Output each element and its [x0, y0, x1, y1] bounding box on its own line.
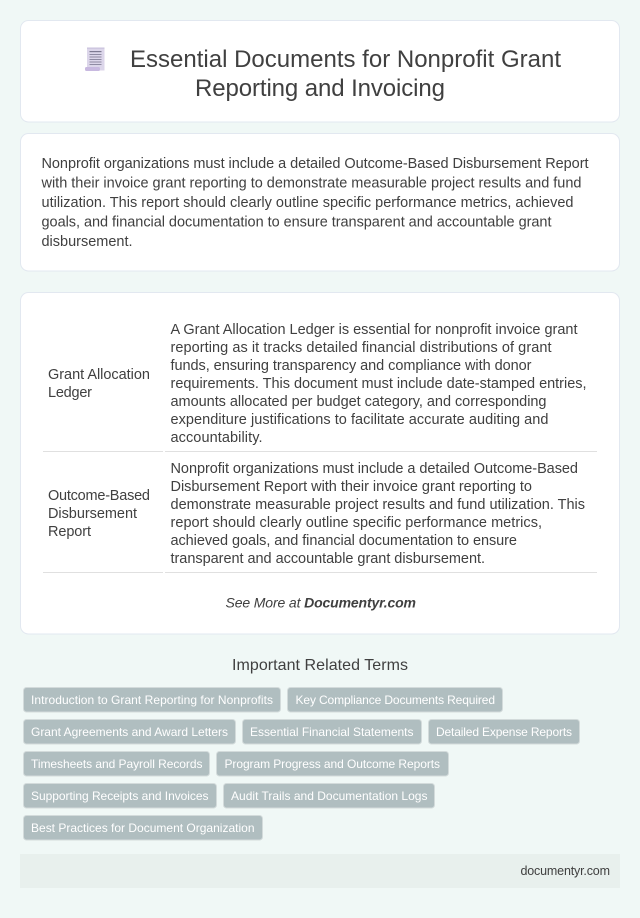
intro paragraph: goals, and financial documentation to ensure transparent and accountable grant: [42, 214, 552, 230]
tag: Supporting Receipts and Invoices: [31, 789, 208, 803]
row: Grant Allocation Ledger description: reporting as it tracks detailed financial distributions of grant: [170, 340, 552, 356]
tag: [24, 720, 236, 744]
row: Outcome-Based Disbursement Report label: [48, 488, 150, 540]
tag: Key Compliance Documents Required: [296, 693, 495, 707]
related term tags: [24, 688, 580, 840]
row: Outcome-Based Disbursement Report description: report should clearly outline specific performance metrics,: [170, 515, 542, 531]
tag: Detailed Expense Reports: [436, 725, 572, 739]
footer site name: documentyr.com: [520, 864, 610, 878]
tag: Introduction to Grant Reporting for Nonprofits: [31, 693, 273, 707]
title: Reporting and Invoicing: [195, 75, 445, 102]
tag: Grant Agreements and Award Letters: [31, 725, 228, 739]
tag: [24, 784, 216, 808]
row: Outcome-Based Disbursement Report label: Report: [48, 524, 91, 540]
row: Outcome-Based Disbursement Report description: Disbursement Report with their invoice grant reporting to: [170, 479, 532, 495]
title: [130, 46, 561, 102]
row: Outcome-Based Disbursement Report description: demonstrate measurable project results and fund utilization. This: [170, 497, 585, 513]
tag: [224, 784, 434, 808]
row: Grant Allocation Ledger description: expenditure justifications to facilitate accurate auditing and: [170, 412, 548, 428]
tag: Essential Financial Statements: [250, 725, 414, 739]
intro paragraph: with their invoice grant reporting to demonstrate measurable project results and fund: [40, 176, 582, 192]
tag: Best Practices for Document Organization: [31, 821, 254, 835]
intro paragraph: utilization. This report should clearly outline specific performance metrics, achieved: [42, 195, 574, 211]
row: Outcome-Based Disbursement Report label: Outcome-Based: [48, 488, 150, 504]
row: Outcome-Based Disbursement Report description: Nonprofit organizations must include a detailed Outcome-Based: [170, 461, 578, 477]
row: Grant Allocation Ledger label: Ledger: [48, 385, 92, 401]
tag: [288, 688, 502, 712]
row: Outcome-Based Disbursement Report description: achieved goals, and financial documentation to ensure: [170, 533, 517, 549]
intro paragraph: [40, 156, 588, 250]
icon: document scroll: [85, 48, 104, 71]
intro paragraph: Nonprofit organizations must include a detailed Outcome-Based Disbursement Report: [42, 156, 588, 172]
tag: Audit Trails and Documentation Logs: [231, 789, 428, 803]
footer bar: [20, 854, 620, 888]
intro paragraph: disbursement.: [42, 234, 132, 250]
panel: documents table: [20, 292, 620, 634]
row: Grant Allocation Ledger description: [170, 322, 586, 446]
tag: [216, 752, 448, 776]
see more link: See More at Documentyr.com: [226, 594, 416, 610]
row: Grant Allocation Ledger description: accountability.: [170, 430, 262, 446]
tag: [24, 688, 280, 712]
tag: [428, 720, 580, 744]
row: Outcome-Based Disbursement Report description: [170, 461, 585, 567]
panel: introduction: [20, 134, 620, 271]
row: Grant Allocation Ledger description: amounts allocated per budget category, and corresponding: [170, 394, 546, 410]
row: Grant Allocation Ledger description: funds, ensuring transparency and compliance with donor: [170, 358, 532, 374]
tag: [24, 752, 210, 776]
row: Grant Allocation Ledger label: Grant Allocation: [48, 367, 150, 383]
tag: Timesheets and Payroll Records: [31, 757, 202, 771]
row: Outcome-Based Disbursement Report label: Disbursement: [48, 506, 137, 522]
tag: [24, 816, 262, 840]
heading: Important Related Terms: Important Related Terms: [232, 657, 408, 674]
row: Grant Allocation Ledger description: requirements. This document must include date-stamped entries,: [170, 376, 586, 392]
tag: Program Progress and Outcome Reports: [224, 757, 440, 771]
row: Grant Allocation Ledger description: A Grant Allocation Ledger is essential for nonprofit invoice grant: [170, 322, 578, 338]
row: Outcome-Based Disbursement Report description: transparent and accountable grant disbursement.: [170, 551, 485, 567]
title: Essential Documents for Nonprofit Grant: [130, 46, 561, 73]
tag: [242, 720, 422, 744]
row: Grant Allocation Ledger label: [48, 367, 150, 401]
panel: header: [20, 20, 620, 122]
